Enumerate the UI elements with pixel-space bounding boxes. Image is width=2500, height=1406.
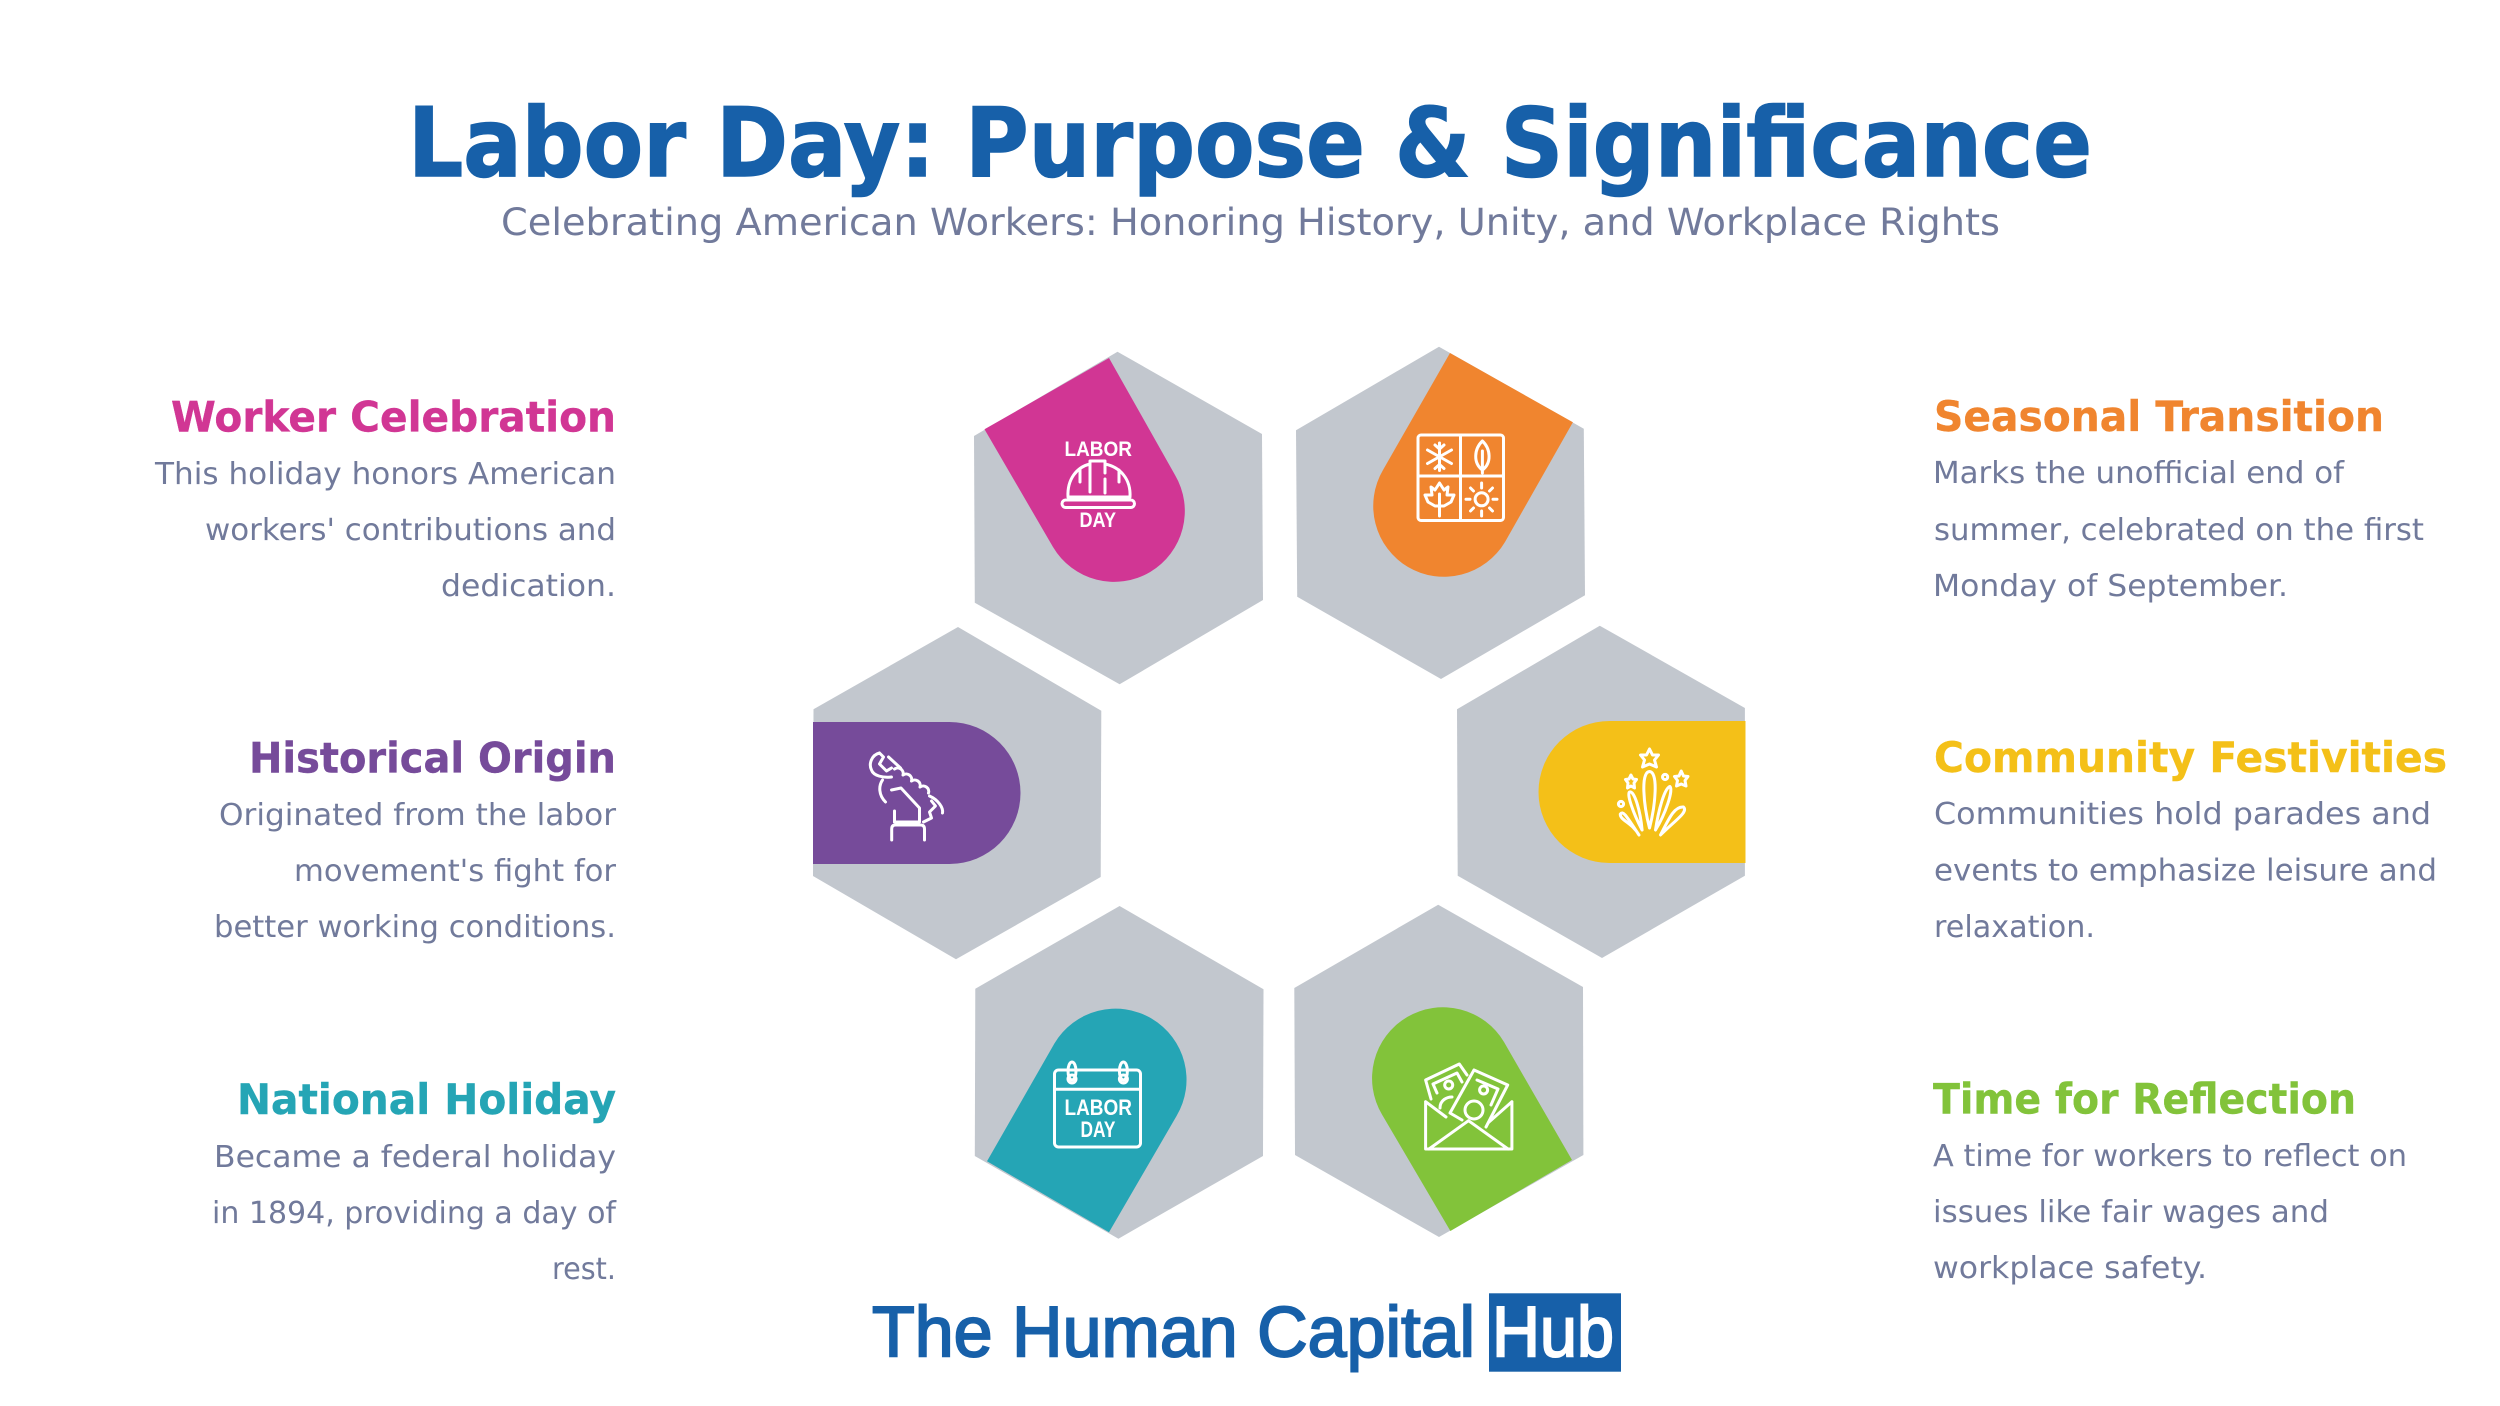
logo wordmark: The Human Capital [872, 1294, 1475, 1373]
description: Community Festivities: events to emphasize leisure and [1934, 854, 2437, 888]
description: Time for Reflection: A time for workers to reflect on [1933, 1139, 2407, 1174]
description: National Holiday: Became a federal holiday [214, 1140, 616, 1175]
grey hexagon [1296, 347, 1585, 679]
text block: Seasonal Transition [1933, 392, 2424, 604]
description: Seasonal Transition: Monday of September. [1933, 569, 2288, 604]
subtitle text: Celebrating American Workers: Honoring History, Unity, and Workplace Rights [501, 201, 2000, 244]
icon: envelope with money [1426, 1064, 1512, 1149]
description: Worker Celebration: dedication. [441, 569, 616, 604]
icon: fireworks [1618, 749, 1688, 835]
icon: calendar: DAY [1080, 1117, 1116, 1142]
icon: four seasons grid [1418, 435, 1504, 520]
heading: National Holiday: National Holiday [237, 1075, 616, 1124]
text block: Worker Celebration [154, 392, 616, 604]
text block: Historical Origin [214, 734, 616, 945]
description: Time for Reflection: workplace safety. [1933, 1251, 2207, 1286]
icon: labor day helmet: LABOR [1064, 438, 1132, 461]
yellow pin [1538, 721, 1746, 863]
grey hexagon [813, 627, 1101, 959]
description: Community Festivities: Communities hold parades and [1934, 797, 2431, 832]
icon: labor day helmet [1062, 438, 1134, 532]
pink pin [984, 358, 1185, 582]
teal pin [987, 1009, 1187, 1232]
description: National Holiday: in 1894, providing a day of [212, 1196, 617, 1231]
panel: hexagon Historical Origin [813, 627, 1101, 959]
icon: labor day helmet: DAY [1080, 509, 1116, 532]
grey hexagon [975, 906, 1264, 1239]
panel: hexagon National Holiday [975, 906, 1264, 1239]
panel: hexagon Seasonal Transition [1296, 347, 1585, 679]
description: Community Festivities [1934, 797, 2437, 945]
description: Seasonal Transition: Marks the unofficial end of [1933, 456, 2345, 491]
text block: Community Festivities [1934, 733, 2447, 945]
grey hexagon [974, 352, 1263, 684]
panel: hexagon Worker Celebration [974, 352, 1263, 684]
description: Historical Origin: Originated from the labor [219, 798, 616, 833]
description: Worker Celebration: This holiday honors American [154, 457, 616, 492]
panel: hexagon Time for Reflection [1294, 905, 1583, 1237]
icon: calendar: LABOR [1064, 1095, 1132, 1120]
green pin [1372, 1007, 1572, 1231]
description: Seasonal Transition [1933, 456, 2424, 604]
heading: Seasonal Transition: Seasonal Transition [1934, 392, 2384, 441]
description: National Holiday: rest. [552, 1252, 616, 1287]
icon: hand with wrench [870, 753, 943, 840]
panel: hexagon Community Festivities [1457, 626, 1746, 958]
logo [872, 1293, 1621, 1373]
description: Worker Celebration [154, 457, 616, 604]
description: Historical Origin: movement's fight for [294, 854, 616, 889]
description: Historical Origin: better working conditions. [214, 910, 616, 945]
description: Community Festivities: relaxation. [1934, 910, 2095, 945]
description: National Holiday [212, 1140, 617, 1287]
grey hexagon [1457, 626, 1745, 958]
heading: Time for Reflection: Time for Reflection [1933, 1074, 2356, 1124]
description: Time for Reflection [1933, 1139, 2407, 1286]
text block: Time for Reflection [1933, 1074, 2407, 1286]
purple pin [813, 722, 1020, 864]
orange pin [1373, 353, 1573, 577]
title: Labor Day: Purpose & Significance [408, 89, 2092, 199]
icon: calendar [1054, 1062, 1140, 1147]
description: Time for Reflection: issues like fair wages and [1933, 1195, 2329, 1230]
description: Seasonal Transition: summer, celebrated on the first [1934, 513, 2424, 548]
text block: National Holiday [212, 1075, 617, 1287]
logo badge: Hub: Hub [1492, 1294, 1614, 1373]
heading: Historical Origin: Historical Origin [249, 734, 616, 782]
description: Worker Celebration: workers' contributions and [205, 513, 616, 548]
heading: Worker Celebration: Worker Celebration [171, 392, 616, 442]
description: Historical Origin [214, 798, 616, 945]
grey hexagon [1294, 905, 1583, 1237]
heading: Community Festivities: Community Festivities [1934, 733, 2447, 782]
